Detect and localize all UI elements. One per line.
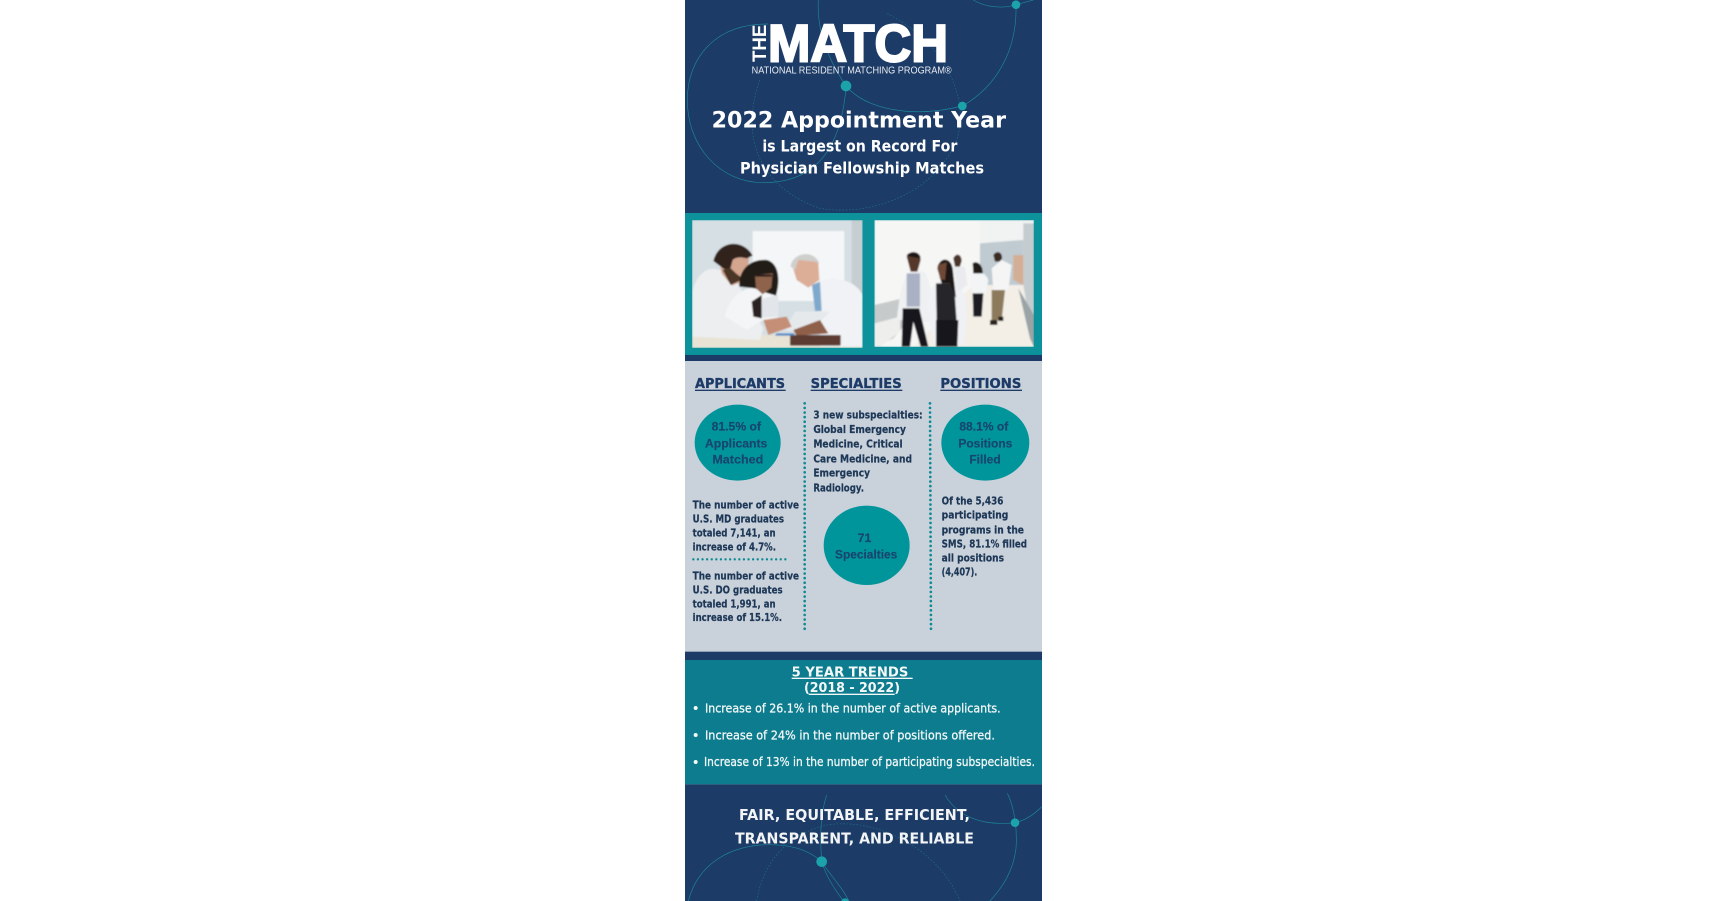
column: applicants xyxy=(693,377,799,624)
panel: footer xyxy=(685,784,1042,901)
stat circle: 71 specialties: 71 xyxy=(858,531,871,545)
network nodes xyxy=(841,0,1020,110)
column divider right xyxy=(930,403,931,632)
photo: doctors reviewing tablet xyxy=(692,220,863,348)
text: DO graduates: totaled 1,991, an xyxy=(693,597,776,610)
stat circle: 81.5%: Applicants xyxy=(705,436,767,450)
bullet list: Increase of 26.1% in the number of active applicants. xyxy=(705,701,1001,715)
text: MD graduates xyxy=(693,498,799,553)
infographic xyxy=(685,0,1042,901)
stat circle: 88.1%: Filled xyxy=(969,452,1001,466)
text: new subspecialties: Radiology. xyxy=(813,481,864,494)
title: Physician Fellowship Matches xyxy=(740,158,984,177)
heading: positions: POSITIONS xyxy=(940,377,1021,392)
panel: photo band xyxy=(685,213,1042,361)
background network arcs xyxy=(688,793,1042,901)
text: participating programs: Of the 5,436 xyxy=(942,494,1004,507)
title: is Largest on Record For xyxy=(762,137,957,156)
text: new subspecialties: Global Emergency xyxy=(813,423,906,436)
text: MD graduates: U.S. MD graduates xyxy=(693,513,784,526)
stat circle: 88.1%: Positions xyxy=(958,436,1012,450)
panel: header xyxy=(685,0,1042,213)
column: specialties xyxy=(811,377,923,585)
stat circle: 81.5%: 81.5% of xyxy=(712,420,762,434)
text: new subspecialties: Care Medicine, and xyxy=(813,452,912,465)
stat circle: 71 specialties xyxy=(824,506,910,585)
column divider left xyxy=(801,403,809,632)
text: DO graduates: increase of 15.1%. xyxy=(693,611,782,624)
network nodes xyxy=(816,818,1019,901)
logo: The Match: NATIONAL RESIDENT MATCHING PROGRAM® xyxy=(752,66,952,77)
text: participating programs: programs in the xyxy=(942,523,1024,536)
stat circle: 81.5% xyxy=(695,405,781,481)
closing statement: TRANSPARENT, AND RELIABLE xyxy=(735,829,974,847)
heading: 5 year trends: (2018 - 2022) xyxy=(804,681,900,696)
text: new subspecialties: Emergency xyxy=(813,467,870,480)
stat circle: 81.5%: Matched xyxy=(712,452,763,466)
closing statement xyxy=(735,806,974,847)
text: participating programs: (4,407). xyxy=(942,565,977,578)
stat circle: 88.1%: 88.1% of xyxy=(959,420,1009,434)
title: 2022 Appointment Year xyxy=(712,108,1006,133)
title xyxy=(712,108,1006,177)
text: participating programs: participating xyxy=(942,509,1008,522)
text: participating programs: all positions xyxy=(942,551,1004,564)
text: new subspecialties xyxy=(813,409,923,494)
text: new subspecialties: 3 new subspecialties: xyxy=(813,409,923,422)
heading: applicants: APPLICANTS xyxy=(695,377,785,392)
panel: statistics columns xyxy=(685,361,1042,652)
heading: 5 year trends xyxy=(792,665,913,696)
text: MD graduates: The number of active xyxy=(693,498,799,511)
bullet list xyxy=(694,701,1035,769)
logo: The Match: MATCH xyxy=(768,15,948,74)
background network arcs xyxy=(687,0,1033,210)
stat circle: 88.1% xyxy=(941,405,1029,481)
text: DO graduates: U.S. DO graduates xyxy=(693,583,783,596)
text: new subspecialties: Medicine, Critical xyxy=(813,438,903,451)
logo: The Match: THE xyxy=(750,25,771,62)
heading: specialties: SPECIALTIES xyxy=(811,377,902,392)
text: DO graduates: The number of active xyxy=(693,569,799,582)
heading: 5 year trends: 5 YEAR TRENDS xyxy=(792,665,908,680)
column: positions xyxy=(940,377,1029,578)
panel: five year trends xyxy=(685,652,1042,784)
text: participating programs xyxy=(942,494,1027,578)
text: participating programs: SMS, 81.1% filled xyxy=(942,537,1027,550)
bullet list: Increase of 13% in the number of participating subspecialties. xyxy=(704,755,1035,769)
closing statement: FAIR, EQUITABLE, EFFICIENT, xyxy=(739,806,970,824)
bullet list: Increase of 24% in the number of positions offered. xyxy=(705,728,995,742)
stat circle: 71 specialties: Specialties xyxy=(835,547,897,561)
photo: doctors walking in hallway xyxy=(874,220,1034,347)
text: DO graduates xyxy=(693,569,799,624)
text: MD graduates: increase of 4.7%. xyxy=(693,540,776,553)
text: MD graduates: totaled 7,141, an xyxy=(693,526,776,539)
